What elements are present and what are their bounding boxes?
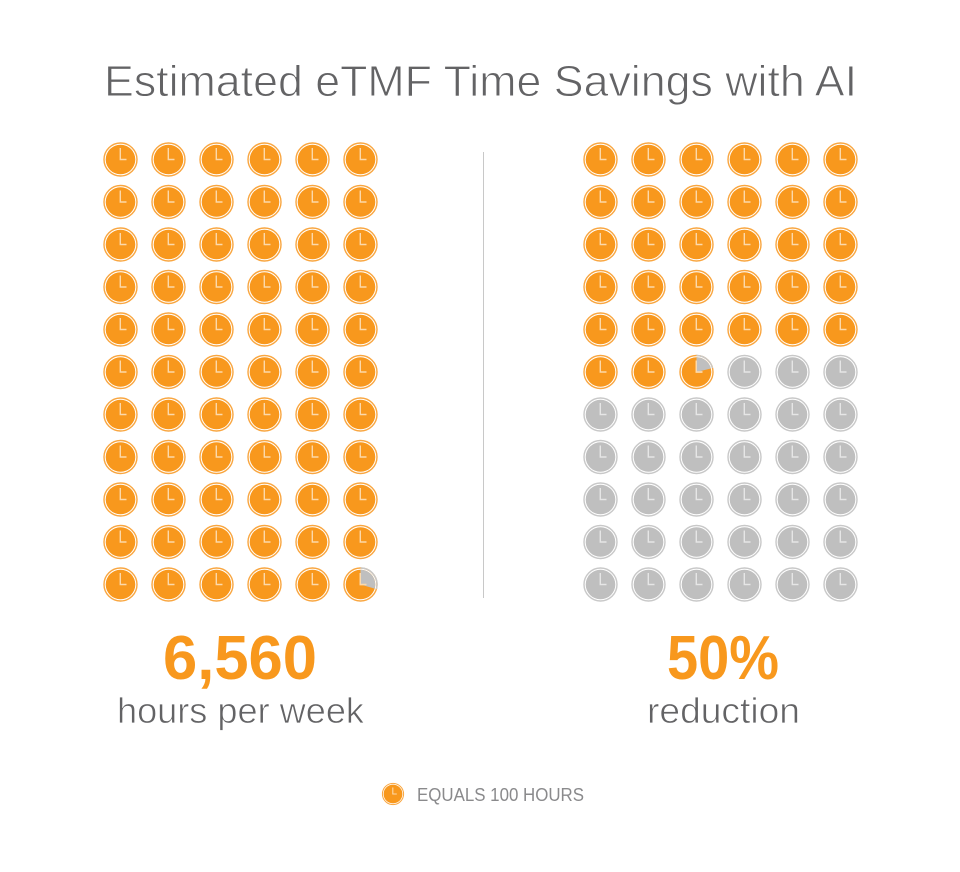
stat value: 50%: 50% xyxy=(667,624,779,693)
legend: EQUALS 100 HOURS xyxy=(417,785,584,805)
panel: hours per week clock grid xyxy=(104,143,377,601)
stat label: hours per week: hours per week xyxy=(117,690,365,731)
stat value: 6,560: 6,560 xyxy=(163,624,317,693)
title: Estimated eTMF Time Savings with AI xyxy=(104,57,857,106)
icon: legend clock xyxy=(382,783,404,805)
icon: partially filled clock xyxy=(680,356,713,388)
icon: partially filled clock xyxy=(344,568,377,601)
stat label: reduction: reduction xyxy=(647,690,800,731)
panel: reduction clock grid xyxy=(584,143,857,601)
